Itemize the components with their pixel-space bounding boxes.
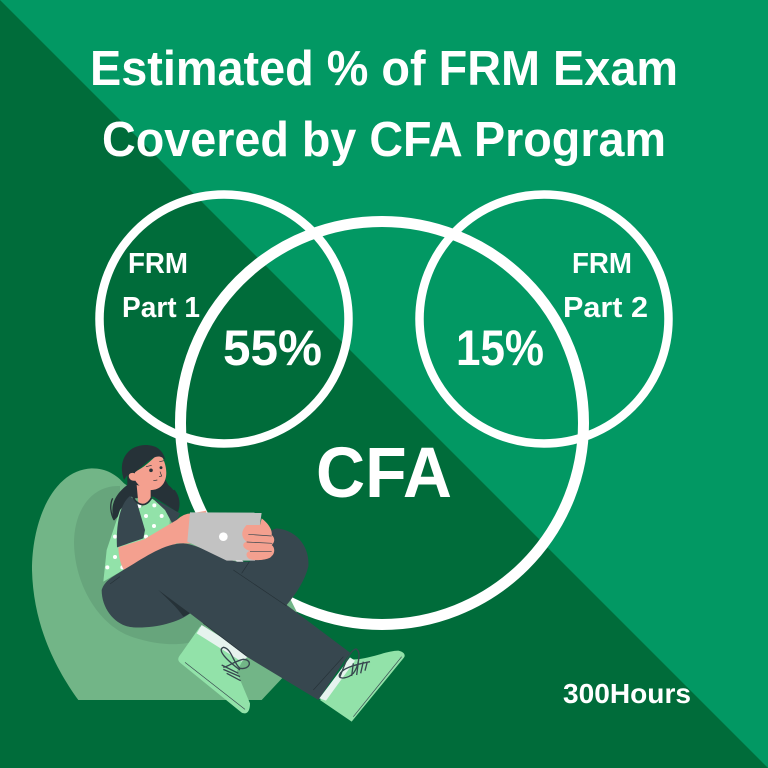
title: Estimated % of FRM Exam: [90, 42, 678, 96]
shirt: [103, 497, 170, 582]
title: [90, 42, 678, 167]
label: CFA: CFA: [316, 434, 452, 513]
far shoe: [178, 627, 250, 713]
far shoe laces: [221, 647, 249, 681]
label: FRM Part 1: FRM: [128, 248, 188, 280]
illustration: woman with tablet on beanbag: [32, 445, 405, 722]
label: FRM Part 1: [122, 248, 200, 324]
label: FRM Part 2: Part 2: [563, 292, 648, 324]
label: FRM Part 2: [563, 248, 648, 324]
circle: CFA: [180, 222, 584, 624]
near shoe laces: [339, 649, 370, 678]
neck: [137, 485, 151, 507]
brand: 300Hours: 300Hours: [563, 678, 691, 709]
arm: [118, 511, 207, 570]
beanbag shadow: [74, 486, 210, 644]
venn diagram: [100, 194, 668, 624]
circle: FRM Part 1: [100, 194, 348, 444]
front hair: [122, 445, 165, 480]
trousers: [102, 528, 350, 700]
beanbag: [32, 468, 297, 700]
back hair: [112, 472, 179, 521]
face: [129, 453, 166, 490]
label: FRM Part 1: Part 1: [122, 292, 200, 324]
value: 55%: 55%: [223, 320, 322, 376]
title: Covered by CFA Program: [102, 113, 666, 167]
circle: FRM Part 2: [420, 194, 668, 444]
facial features: [146, 461, 164, 481]
vest: [117, 496, 145, 547]
hand: [242, 518, 274, 560]
value: 15%: 15%: [456, 320, 544, 376]
tablet: [187, 512, 262, 561]
label: FRM Part 2: FRM: [572, 248, 632, 280]
near shoe: [320, 651, 405, 722]
